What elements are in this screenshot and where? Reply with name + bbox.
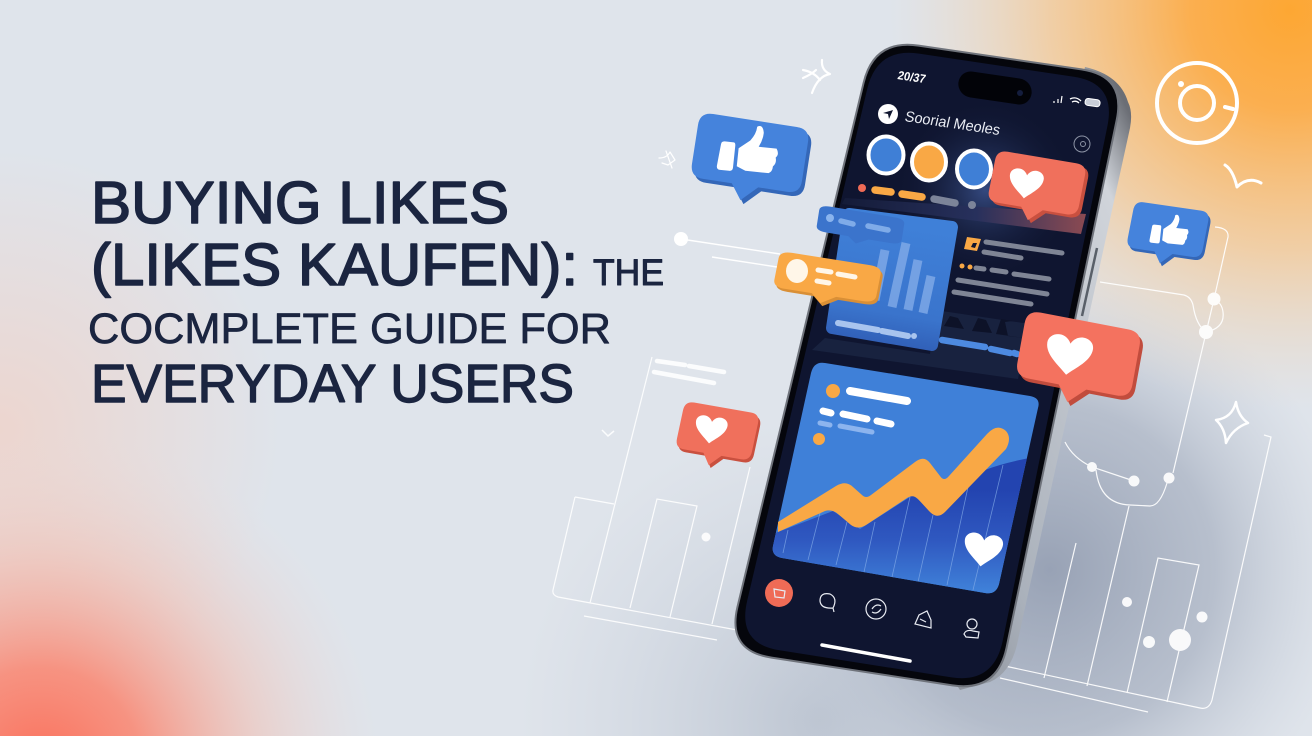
decorative sparkle icons [659, 60, 1248, 443]
screen band behind story row [842, 198, 1086, 234]
screen band behind gallery row [812, 310, 1030, 379]
title: (LIKES KAUFEN): [91, 232, 578, 298]
phone body [735, 45, 1118, 686]
icon: heart [1043, 333, 1094, 378]
post text lines [954, 237, 1062, 304]
title: BUYING LIKES [91, 170, 509, 236]
story circles [868, 136, 991, 188]
icon: heart [1007, 167, 1045, 201]
phone silver frame [900, 67, 1131, 690]
icon: heart [693, 414, 729, 446]
title [88, 170, 664, 414]
blue like bubble, right [1124, 201, 1212, 272]
app title: Soorial Meoles [903, 108, 1002, 139]
icon: thumbs up [1149, 212, 1190, 247]
app logo [878, 104, 898, 124]
large red heart bubble [1012, 310, 1145, 417]
chart dark fill [772, 458, 1027, 594]
icon: heart on chart [962, 531, 1004, 569]
status time: 20/37 [896, 68, 928, 86]
phone [735, 45, 1131, 690]
connector lines with node left of phone [674, 232, 780, 267]
line chart outline: right bars and nodes [1000, 227, 1271, 712]
card text rows [813, 384, 907, 445]
status icons [1054, 96, 1100, 107]
title: COCMPLETE GUIDE FOR [88, 305, 611, 353]
orange comment bubble [771, 251, 884, 314]
blue like bubble, left [688, 112, 813, 213]
icon: settings [1074, 136, 1090, 152]
phone side button [1082, 248, 1097, 316]
gallery silhouettes [944, 316, 1024, 338]
dynamic island [957, 70, 1033, 106]
red heart bubble on phone [985, 150, 1090, 231]
bottom navigation [765, 579, 979, 638]
home indicator [822, 645, 910, 661]
small red heart bubble, left [673, 401, 762, 475]
blue mini bubble [815, 205, 905, 251]
blue growth chart card [765, 363, 1045, 600]
line chart outline: left bars [553, 357, 750, 640]
icon: thumbs up [716, 122, 781, 176]
phone screen [745, 53, 1109, 678]
blue bar chart card [832, 214, 952, 345]
icon: check swoosh [1225, 165, 1261, 187]
title: EVERYDAY USERS [91, 354, 574, 414]
chart orange wave [778, 428, 1009, 532]
story pills [858, 184, 976, 209]
icon: ring with dot, top right [1157, 63, 1237, 143]
gallery blue pills [942, 340, 1017, 354]
title: THE [593, 252, 664, 293]
